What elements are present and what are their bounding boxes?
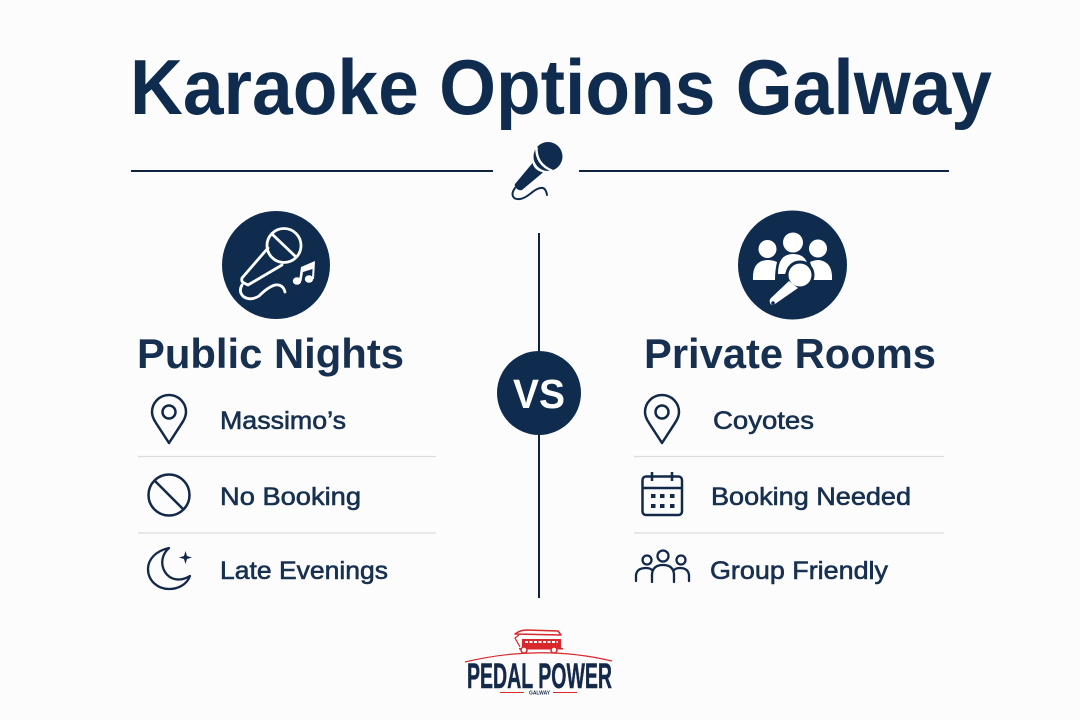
icon: microphone with music notes xyxy=(222,211,330,319)
row: group friendly: Group Friendly xyxy=(710,557,889,585)
row: booking needed: Booking Needed xyxy=(711,483,911,511)
icon: red pedal bus xyxy=(515,630,563,653)
panel: private rooms xyxy=(634,210,944,585)
centre divider line xyxy=(538,233,540,598)
row: no booking: No Booking xyxy=(220,483,361,511)
logo wordmark: PEDAL POWER xyxy=(467,657,612,696)
logo subtitle: GALWAY xyxy=(529,690,551,696)
row: booking needed xyxy=(642,472,911,515)
panel: public nights xyxy=(137,211,436,589)
icon: group with microphone xyxy=(738,210,847,320)
vs badge xyxy=(497,351,581,435)
title divider with microphone xyxy=(131,142,949,199)
logo arc xyxy=(465,653,612,662)
row: massimo's: Massimo’s xyxy=(220,407,346,435)
icon: microphone xyxy=(512,142,562,199)
icon: prohibited sign xyxy=(148,474,190,516)
row: no booking xyxy=(148,474,361,516)
row: massimo's xyxy=(152,395,346,443)
row: coyotes xyxy=(645,395,814,443)
icon: location pin xyxy=(152,395,186,443)
row: late evenings xyxy=(148,548,388,589)
row: late evenings: Late Evenings xyxy=(220,557,388,585)
icon: location pin xyxy=(645,395,679,443)
heading: private rooms: Private Rooms xyxy=(644,330,936,377)
heading: public nights: Public Nights xyxy=(137,330,404,377)
row: coyotes: Coyotes xyxy=(713,407,814,435)
title: Karaoke Options Galway xyxy=(130,43,992,131)
logo: pedal power galway xyxy=(465,630,612,696)
icon: group of people xyxy=(636,550,689,582)
icon: moon and star xyxy=(148,548,192,589)
row: group friendly xyxy=(636,550,889,585)
vs badge: VS xyxy=(513,371,565,417)
icon: calendar xyxy=(642,472,682,515)
